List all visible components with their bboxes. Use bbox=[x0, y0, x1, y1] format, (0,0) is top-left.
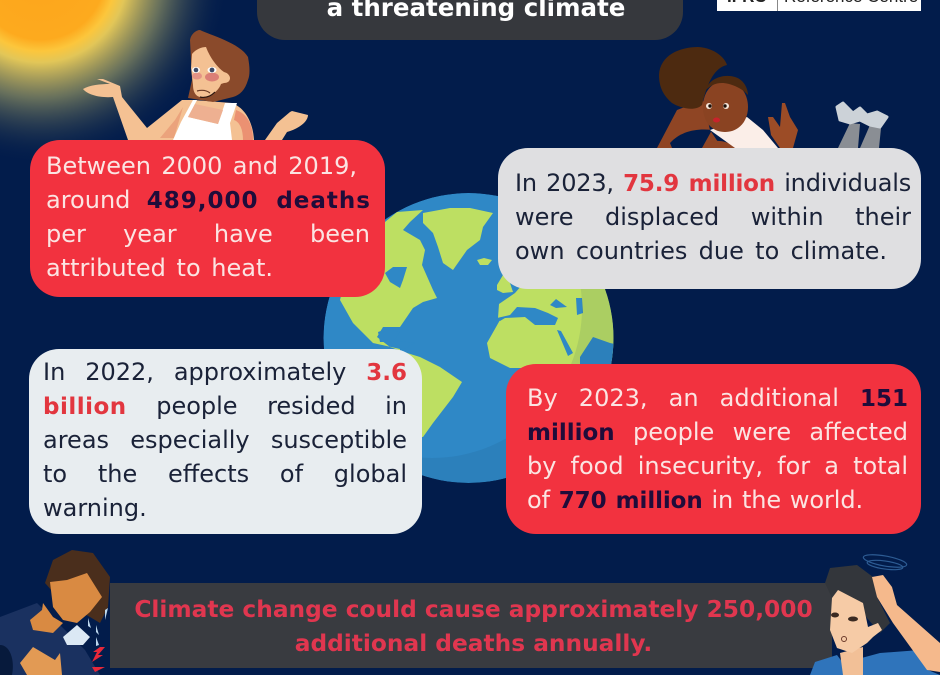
panel: heat deaths bbox=[30, 140, 385, 297]
icon: sun bbox=[0, 0, 230, 165]
text line: by food insecurity, for a total bbox=[527, 452, 908, 480]
header pill bbox=[257, 0, 683, 40]
text line: million people were affected bbox=[527, 418, 908, 446]
text line: own countries due to climate. bbox=[515, 237, 887, 265]
text line: By 2023, an additional 151 bbox=[527, 384, 908, 412]
banner text: Climate change could cause approximately 250,000 bbox=[134, 596, 813, 623]
panel: food insecurity bbox=[506, 364, 921, 534]
bottom banner bbox=[110, 583, 832, 668]
banner text bbox=[134, 596, 813, 657]
text line: Between 2000 and 2019, bbox=[46, 152, 357, 180]
text line: were displaced within their bbox=[515, 203, 911, 231]
text line: billion people resided in bbox=[43, 392, 407, 420]
text line: of 770 million in the world. bbox=[527, 486, 863, 514]
logo: IFRC Reference Centre bbox=[717, 0, 921, 11]
panel: people in susceptible areas bbox=[29, 349, 422, 534]
icon: sick person coughing bbox=[0, 550, 110, 675]
text line: per year have been bbox=[46, 220, 370, 248]
banner text: additional deaths annually. bbox=[295, 630, 652, 657]
icon: mother and baby bbox=[657, 47, 798, 148]
icon: dizzy man bbox=[810, 552, 940, 675]
logo divider bbox=[777, 0, 778, 11]
icon: globe bbox=[324, 193, 614, 483]
text line: attributed to heat. bbox=[46, 254, 273, 282]
icon: woman with sunburn shrugging bbox=[83, 30, 308, 140]
text line: areas especially susceptible bbox=[43, 426, 407, 454]
icon: factory chimneys with smoke bbox=[837, 103, 887, 148]
text line: In 2023, 75.9 million individuals bbox=[515, 169, 911, 197]
text line: to the effects of global bbox=[43, 460, 407, 488]
text line: around 489,000 deaths bbox=[46, 186, 371, 214]
text line: warning. bbox=[43, 494, 147, 522]
panel: displaced people bbox=[498, 148, 921, 289]
illustrations behind panels bbox=[0, 0, 888, 483]
text line: In 2022, approximately 3.6 bbox=[43, 358, 407, 386]
